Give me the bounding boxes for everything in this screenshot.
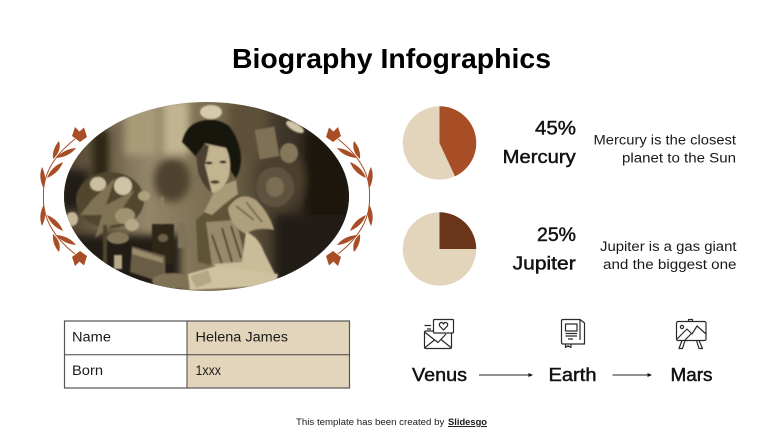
face — [196, 144, 230, 193]
tulip bottom left — [72, 251, 87, 266]
leaves upper left — [40, 141, 76, 188]
text: Jupiter description: and the biggest one — [603, 257, 736, 272]
text: Jupiter description — [600, 239, 737, 272]
hair — [182, 120, 241, 178]
step label: Earth: Earth — [548, 365, 596, 385]
table: biography details: 1xxx — [196, 363, 221, 378]
pie chart: Jupiter 25% — [403, 212, 476, 286]
arrow: Venus to Earth — [479, 373, 533, 377]
table: biography details: Born — [72, 363, 103, 378]
text: Jupiter description: Jupiter is a gas giant — [600, 239, 737, 254]
icon: easel with painting — [676, 320, 706, 348]
stat: Mercury: 45% — [535, 118, 576, 140]
dress — [196, 195, 265, 265]
stat: Mercury: Mercury — [503, 147, 576, 167]
stat: Jupiter: 25% — [537, 224, 576, 246]
text: Mercury description — [594, 132, 736, 166]
stat: Jupiter — [513, 224, 576, 274]
text: Mercury description: planet to the Sun — [622, 150, 736, 166]
stat: Jupiter: Jupiter — [513, 254, 576, 274]
table: biography details — [64, 321, 350, 388]
table: biography details: Name — [72, 330, 111, 344]
leaves lower left — [40, 205, 76, 252]
arm — [214, 232, 276, 274]
neck and chest — [204, 180, 238, 215]
table: biography details: Helena James — [196, 330, 288, 344]
icon: love letter — [424, 320, 454, 348]
pie chart: Mercury 45% — [403, 106, 476, 180]
footer credit: This template has been created by — [296, 417, 447, 428]
title: Biography Infographics — [232, 43, 551, 74]
wall decor — [280, 143, 298, 163]
step label: Mars: Mars — [670, 365, 712, 385]
icon: book — [562, 320, 584, 348]
step label: Venus: Venus — [412, 365, 467, 385]
photo: sepia portrait in oval frame — [60, 100, 355, 295]
stat: Mercury — [503, 118, 576, 167]
text: Mercury description: Mercury is the closest — [594, 132, 736, 148]
bottles and table objects — [160, 197, 164, 225]
footer credit: Slidesgo — [448, 417, 487, 428]
tulip top left — [72, 127, 87, 142]
arrow: Earth to Mars — [612, 373, 652, 377]
decoration: left floral wreath — [40, 127, 87, 266]
decoration: right floral wreath — [326, 127, 373, 266]
flowers — [76, 172, 144, 228]
